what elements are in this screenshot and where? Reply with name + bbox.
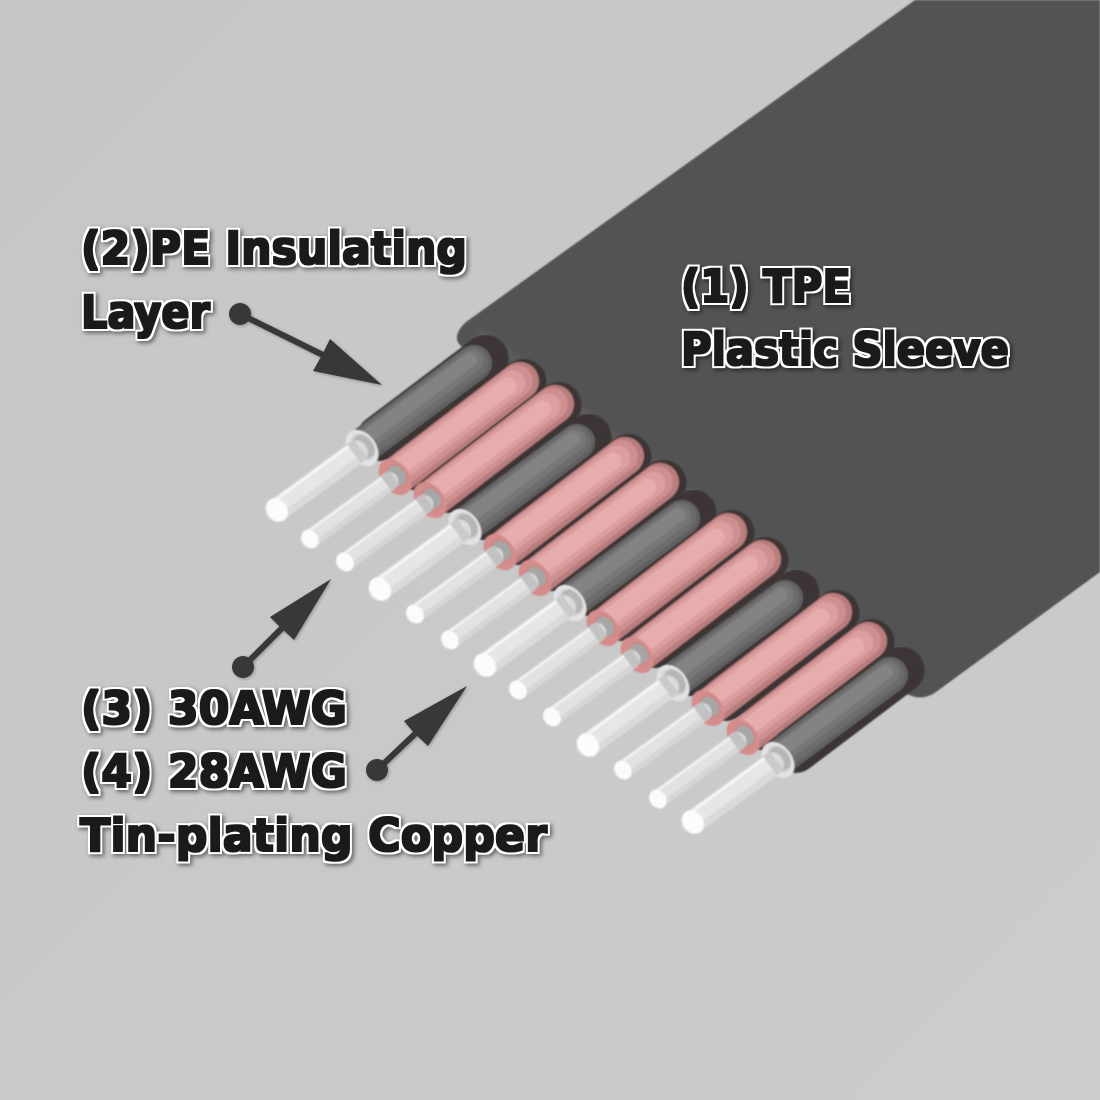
label: conductor gauges and material: Tin-plating Copper <box>80 809 548 862</box>
panel: cable sleeve <box>457 0 1100 698</box>
wire 13: grey insulated <box>677 670 902 838</box>
wire 12: pink insulated <box>646 641 872 812</box>
label: TPE plastic sleeve: Plastic Sleeve <box>681 323 1009 376</box>
wire 8: pink insulated <box>506 532 732 703</box>
wire 6: pink insulated <box>438 482 664 653</box>
label: conductor gauges and material: (4) 28AWG <box>81 745 347 798</box>
label: PE insulating layer: (2)PE Insulating <box>81 222 467 275</box>
label: conductor gauges and material <box>80 682 548 862</box>
wire 3: pink insulated <box>333 404 558 575</box>
label: PE insulating layer <box>81 222 467 339</box>
wire 9: pink insulated <box>540 559 766 730</box>
wire 2: pink insulated <box>298 381 524 552</box>
arrow: 30AWG conductor <box>232 579 331 678</box>
wire 4: grey insulated <box>364 437 588 605</box>
wire 5: pink insulated <box>403 456 628 627</box>
wire 1: grey insulated <box>261 358 486 526</box>
arrow: PE insulating layer <box>229 303 382 385</box>
label: TPE plastic sleeve <box>681 260 1009 376</box>
label: TPE plastic sleeve: (1) TPE <box>681 260 851 313</box>
wire 7: grey insulated <box>469 513 694 681</box>
label: conductor gauges and material: (3) 30AWG <box>81 682 347 735</box>
wire 10: grey insulated <box>572 593 796 761</box>
wire 11: pink insulated <box>611 612 836 783</box>
arrow: 28AWG conductor <box>366 686 467 781</box>
label: PE insulating layer: Layer <box>81 286 211 339</box>
